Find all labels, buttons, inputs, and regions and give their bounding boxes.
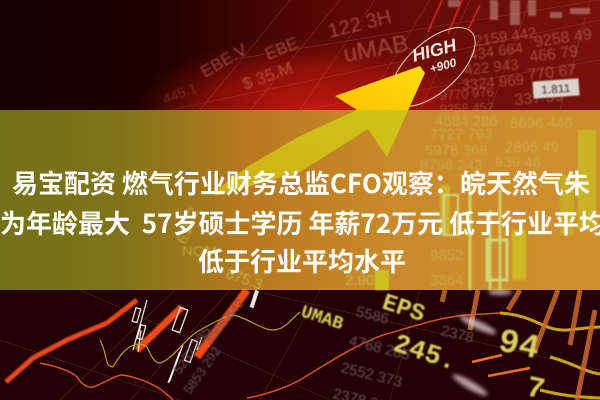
lower gray digits: 3588 642 [201, 296, 247, 347]
red vertical streaks [428, 0, 480, 34]
top table digits: 770 67 [527, 62, 577, 84]
lower yellow continuation [500, 313, 600, 398]
band-region digits: NOM [182, 243, 217, 260]
lower yellow line [100, 312, 300, 367]
band-region digits: 5978 368 [425, 142, 488, 159]
top table digits: EBE [262, 33, 301, 64]
lower gray digits: 4768 285 [347, 332, 412, 364]
top table digits: EBE.V [198, 40, 251, 81]
right side candlesticks in band [375, 130, 596, 290]
white glare specks [451, 289, 512, 398]
band-region digits: 9852 [430, 247, 463, 264]
lower red line [40, 313, 500, 400]
top table digits: uMAB [341, 30, 410, 68]
band-region digits: 2895 49 [505, 139, 559, 156]
top table digits [161, 6, 593, 117]
white price label: 1.811 [541, 81, 571, 97]
label: 94: 94 [495, 324, 543, 369]
label: 245.: 245. [389, 330, 460, 379]
red glow [130, 35, 510, 195]
lower gray digits: 5586 [354, 303, 391, 328]
top table digits: 422 943 [464, 56, 519, 79]
band-region digits: 8696 446 [510, 115, 573, 132]
yellow rising arrow [215, 66, 425, 196]
top table digits: 3324 969 [461, 72, 525, 94]
title line 3: 低于行业平均水平 [198, 242, 406, 279]
band-region digits: 8798 243 [420, 157, 483, 174]
band-region digits: 875.3 [224, 265, 265, 294]
lower gray digits: 5853 292 [180, 344, 224, 397]
lower candlestick chart [6, 290, 259, 383]
yellow ticker labels [298, 290, 548, 400]
lower gray digits: 5237 285 [170, 324, 214, 377]
label: EPS: EPS [379, 290, 428, 329]
band-region digits: 615.2 [174, 205, 203, 246]
band-region digits: 4684 286 [435, 113, 498, 130]
badge: HIGH +900: +900 [428, 55, 458, 76]
title line 2: 为年龄最大 57岁硕士学历 年薪72万元 低于行业平均 [0, 204, 600, 241]
translucent olive title band [0, 110, 600, 290]
band-region digits: 939 48 [495, 154, 541, 171]
top table digits: 9770 976 [439, 84, 494, 103]
label: UMAB: UMAB [298, 303, 346, 335]
lower gray digits: 2552 373 [339, 359, 404, 391]
band-region digits [174, 113, 573, 294]
top table digits: 9258 49 [533, 26, 593, 51]
title line 1: 易宝配资 燃气行业财务总监CFO观察：皖天然气朱 [12, 164, 590, 201]
white price label [532, 78, 580, 99]
band-region digits: 2.90 [345, 272, 374, 289]
top table digits: 122 3H [326, 6, 394, 43]
lower gray digits [170, 296, 476, 400]
band-region digits: 7727 793 [430, 126, 493, 143]
badge: HIGH +900: HIGH [410, 35, 459, 66]
badge: HIGH +900 [378, 14, 488, 120]
top candlesticks [448, 0, 590, 25]
top table digits: 466 79 [528, 43, 579, 66]
lower dark area [0, 290, 600, 400]
top table digits: $ 35.M [240, 58, 295, 94]
bright tones beneath the band [0, 110, 600, 290]
top table digits: 445.1 [161, 80, 199, 107]
lower gray digits: 2378 [439, 322, 476, 347]
top table digits: 337 39 [514, 88, 564, 109]
band-region digits: 3864 [430, 272, 463, 289]
top table digits: 9258 452 [439, 99, 494, 117]
top table digits: 434 664 [468, 40, 524, 64]
top table digits: 2159 442 [473, 24, 538, 50]
short orange strokes [472, 355, 530, 376]
